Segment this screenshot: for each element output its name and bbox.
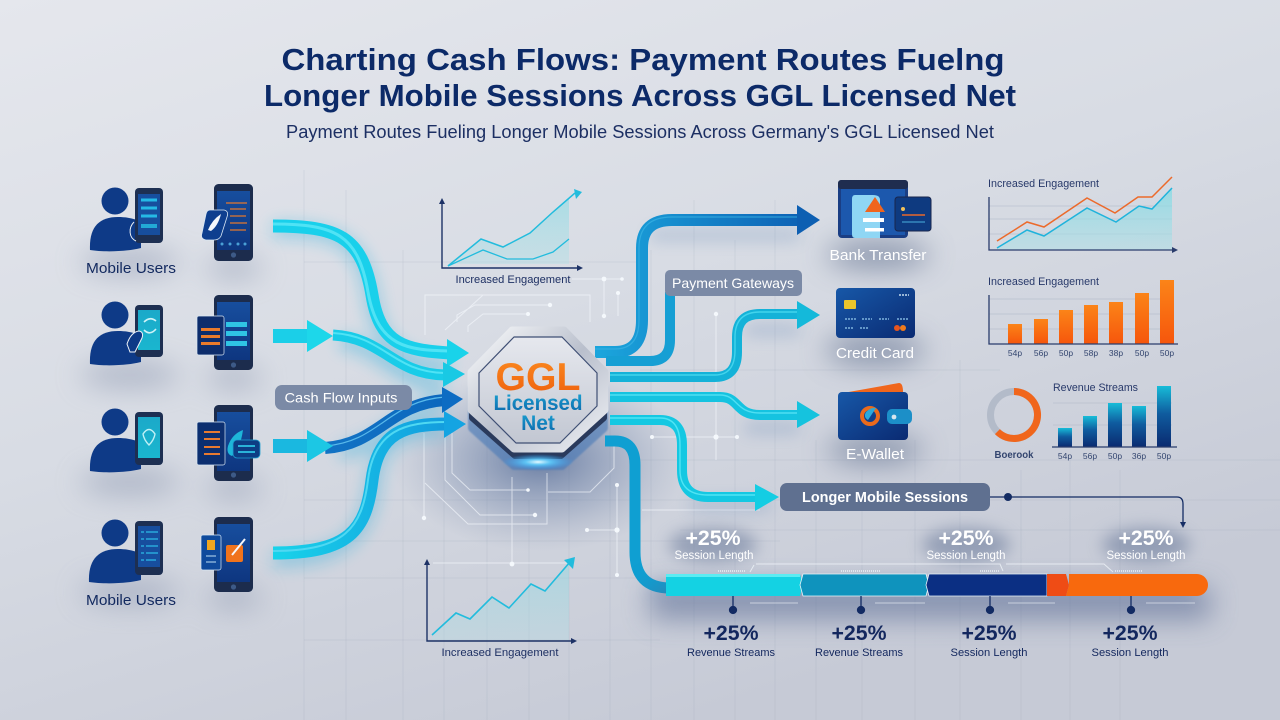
stat: top 1: +25% [686, 527, 741, 550]
axis labels: 36p [1132, 451, 1146, 461]
connector: sessions to timeline [990, 493, 1186, 528]
icon: phone with app 3 [197, 405, 260, 481]
stat: bottom 1: +25% [704, 622, 759, 645]
pill: Payment Gateways [665, 270, 802, 296]
pill: Payment Gateways: Payment Gateways [672, 275, 794, 291]
connector: gateway stem [606, 292, 670, 361]
pill: Cash Flow Inputs: Cash Flow Inputs [284, 390, 398, 406]
axis labels: 38p [1109, 348, 1123, 358]
hub subtitle Net: Net [521, 412, 555, 435]
stat: bottom 4: +25% [1102, 622, 1158, 645]
stat: bottom 2: Revenue Streams [815, 647, 903, 659]
stat: bottom 1 [687, 622, 775, 659]
axis labels: 50p [1160, 348, 1174, 358]
stat: bottom 3 [950, 622, 1028, 659]
icon: bank transfer [838, 180, 931, 238]
donut label: Boerook [994, 449, 1034, 461]
chart: engagement bars [988, 276, 1178, 358]
arrow: flow 3 [273, 387, 463, 462]
chart label: Increased Engagement [456, 274, 570, 286]
icon: credit card [836, 288, 915, 338]
label: E-Wallet: E-Wallet [846, 447, 904, 463]
stat: top 3: Session Length [1106, 550, 1186, 562]
axis labels: 50p [1059, 348, 1073, 358]
icon: user with phone 4 [89, 520, 163, 583]
stat: top 1 [674, 527, 754, 562]
stat: bottom 4 [1092, 622, 1168, 659]
pill: Cash Flow Inputs [275, 385, 412, 410]
stat: bottom 1: Revenue Streams [687, 647, 775, 659]
chart: revenue streams bars [1052, 382, 1177, 461]
hub title GGL: GGL [496, 356, 580, 399]
stat: top 3: +25% [1118, 527, 1174, 550]
title: Longer Mobile Sessions Across GGL Licensed Net [264, 79, 1016, 113]
arrow: flow 1 [273, 224, 469, 367]
label: Mobile Users top: Mobile Users [86, 261, 176, 277]
hub shadow glow [390, 368, 690, 552]
chart: engagement line [988, 177, 1178, 253]
stat: top 3 [1106, 527, 1186, 562]
arrow: flow 2 [273, 320, 465, 387]
panel: payment methods [825, 180, 931, 464]
stat: top 2 [926, 527, 1006, 562]
panel: mobile users column [80, 184, 262, 609]
axis labels: 50p [1108, 451, 1122, 461]
flows: payment routes [595, 205, 1190, 590]
subtitle: Payment Routes Fueling Longer Mobile Sessions Across Germany's GGL Licensed Net [286, 122, 994, 142]
axis labels: 54p [1058, 451, 1072, 461]
title [264, 43, 1016, 113]
flows: cash flow inputs [273, 224, 469, 560]
chart heading: Revenue Streams [1053, 382, 1138, 394]
hub subtitle Licensed: Licensed [494, 392, 582, 415]
chart label: Increased Engagement [442, 647, 558, 659]
chart: increased engagement top center [439, 189, 583, 286]
timeline bar [666, 564, 1208, 614]
icon: phone with app 1 [202, 184, 253, 261]
stat: bottom 3: Session Length [950, 647, 1028, 659]
axis labels: 50p [1135, 348, 1149, 358]
icon: e-wallet [838, 383, 912, 440]
hub: GGL Licensed Net [471, 330, 605, 470]
arrow: to bank transfer [595, 205, 820, 352]
stat: top 2: Session Length [926, 550, 1006, 562]
stat: bottom 3: +25% [962, 622, 1017, 645]
chart heading: Increased Engagement [988, 178, 1099, 190]
stat: bottom 4: Session Length [1092, 647, 1168, 659]
arrow: to e-wallet [610, 395, 820, 428]
icon: phone with app 4 [201, 517, 253, 592]
timeline markers [730, 596, 1134, 614]
stat: bottom 2: +25% [832, 622, 887, 645]
axis labels: 58p [1084, 348, 1098, 358]
chart: donut [990, 392, 1038, 461]
stat: top 1: Session Length [674, 550, 754, 562]
axis labels [1058, 451, 1171, 461]
axis labels [1008, 348, 1174, 358]
axis labels: 56p [1083, 451, 1097, 461]
timeline shadow [650, 588, 1210, 618]
pill: Longer Mobile Sessions [780, 483, 990, 511]
icon: user with phone 1 [90, 188, 163, 251]
stat: bottom 2 [815, 622, 903, 659]
stat: top 2: +25% [938, 527, 994, 550]
axis labels: 56p [1034, 348, 1048, 358]
label: Mobile Users bottom: Mobile Users [86, 593, 176, 609]
arrow: flow 4 [273, 411, 466, 553]
connector: hub to timeline [605, 441, 670, 588]
title: Charting Cash Flows: Payment Routes Fuelng [282, 43, 1004, 77]
pill: Longer Mobile Sessions: Longer Mobile Sessions [802, 489, 968, 506]
icon: user with phone 3 [90, 408, 163, 472]
axis labels: 50p [1157, 451, 1171, 461]
arrow: to credit card [610, 301, 820, 377]
circuit traces [422, 277, 760, 577]
arrow: to longer mobile sessions [610, 418, 779, 511]
icon: user with phone 2 [90, 302, 163, 365]
chart: increased engagement bottom center [424, 557, 577, 659]
chart heading: Increased Engagement [988, 276, 1099, 288]
icon: phone with app 2 [197, 295, 253, 370]
axis labels: 54p [1008, 348, 1022, 358]
label: Credit Card: Credit Card [836, 346, 914, 362]
label: Bank Transfer: Bank Transfer [830, 248, 927, 264]
